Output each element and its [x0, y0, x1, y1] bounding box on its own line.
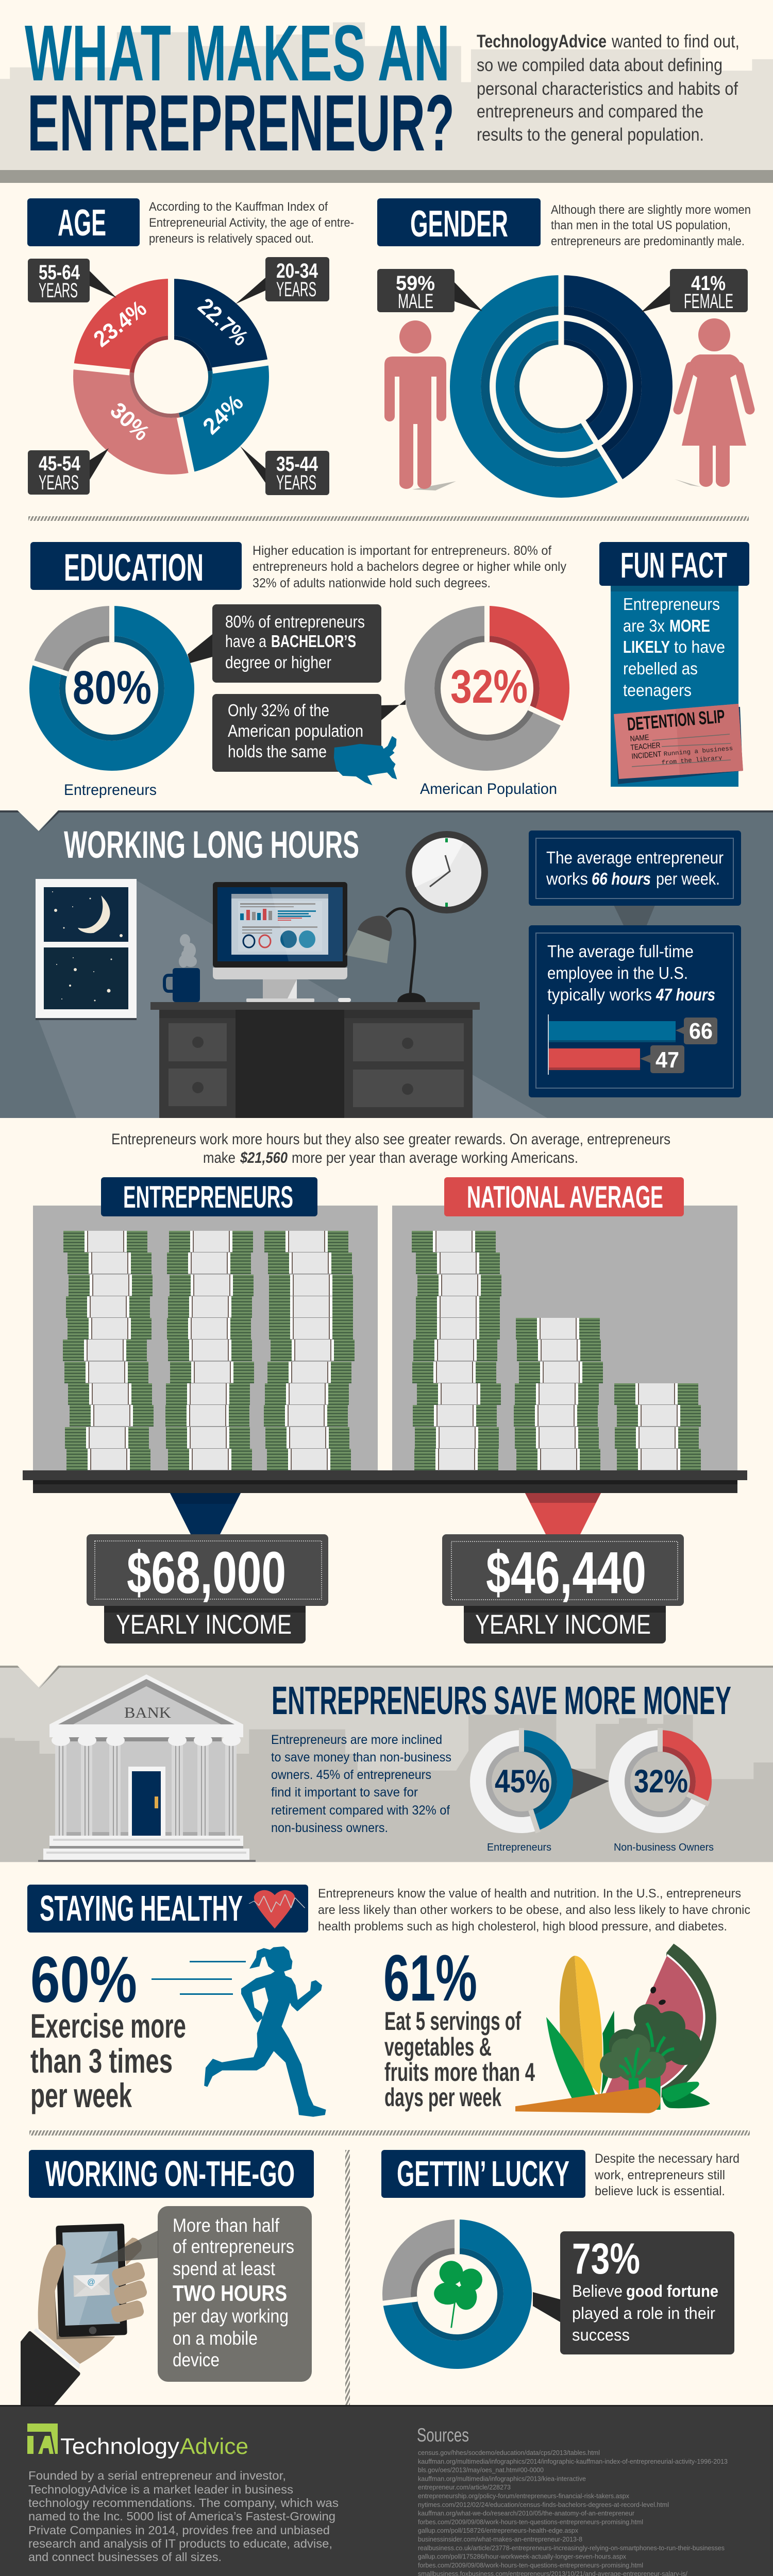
panel: age: [27, 198, 354, 495]
age percentages: [89, 294, 253, 446]
heading: [29, 2150, 314, 2198]
education donut: american population 32%: 32%: [450, 660, 528, 713]
money stack 5: [514, 1318, 603, 1470]
sources list: gallup.com/poll/158726/entrepreneurs-health-edge.aspx: [418, 2527, 578, 2534]
callout: 35-44 years: YEARS: [276, 471, 316, 494]
savings text: find it important to save for: [271, 1785, 418, 1800]
callout: bachelor's degree: BACHELOR’S: [271, 632, 356, 651]
bar chart: 66 vs 47 hours: 47: [656, 1047, 679, 1073]
icon: mouse: [338, 998, 351, 1002]
icon: heart: [249, 1890, 305, 1928]
callout: 59% male: 59%: [396, 272, 435, 295]
fun fact text: MORE: [669, 616, 710, 635]
callout: 59% male: [377, 269, 482, 313]
icon: us map: [334, 736, 397, 785]
intro text: [477, 31, 740, 145]
callout: 73%: played a role in their: [572, 2304, 715, 2323]
savings text: to save money than non-business: [271, 1750, 451, 1765]
company text: and connect businesses of all sizes.: [28, 2550, 222, 2564]
icon: bank: BANK: [124, 1704, 171, 1721]
fun fact text: rebelled as: [623, 659, 698, 678]
callout: 20-34 years: [236, 257, 329, 304]
income card: entrepreneurs: YEARLY INCOME: [116, 1609, 292, 1640]
heading: WORKING LONG HOURS: [64, 823, 359, 866]
callout: 59% male: MALE: [398, 290, 433, 313]
gray callout: per day working: [173, 2306, 289, 2327]
age percentages: 23.4%: [89, 296, 151, 352]
national average tab: NATIONAL AVERAGE: [467, 1180, 663, 1214]
fun fact text: LIKELY: [623, 637, 670, 656]
income text: Entrepreneurs work more hours but they also see greater rewards. On average, entrepreneurs: [111, 1131, 670, 1148]
sources list: realbusiness.co.uk/article/23778-entrepreneurs-increasingly-relying-on-smartphones-to-run-their-businesses: [418, 2544, 725, 2552]
sources list: census.gov/hhes/socdemo/education/data/cps/2013/tables.html: [418, 2449, 600, 2456]
income text: $21,560: [240, 1149, 288, 1166]
education text: entrepreneurs hold a bachelors degree or higher while only: [253, 560, 566, 574]
callout: 45-54 years: [28, 448, 109, 495]
label: Non-business Owners: [614, 1842, 714, 1853]
stat: 61% nutrition: days per week: [384, 2083, 501, 2112]
income card: entrepreneurs: [87, 1534, 328, 1643]
logo: Technology: [60, 2434, 179, 2459]
income text: [111, 1131, 670, 1166]
callout: employee hours with bar chart: 47 hours: [656, 985, 715, 1004]
income card: entrepreneurs: $68,000: [127, 1540, 286, 1606]
stat: 61% nutrition: [383, 1941, 535, 2112]
icon: man: [384, 320, 456, 490]
callout: employee hours with bar chart: employee in the U.S.: [547, 963, 688, 982]
heading: WORKING ON-THE-GO: [45, 2154, 295, 2194]
shelf: [23, 1470, 747, 1493]
lucky text: [594, 2151, 740, 2198]
funnel: national average: [525, 1493, 601, 1534]
sources heading: Sources: [417, 2425, 469, 2446]
age text: According to the Kauffman Index of: [149, 200, 328, 214]
icon: desk lamp: [345, 909, 426, 1002]
connector: [569, 1768, 609, 1800]
detention slip: from the library: [661, 754, 722, 767]
education text: [253, 544, 566, 590]
intro text: so we compiled data about defining: [477, 55, 722, 75]
callout: 41% female: [641, 269, 748, 313]
company text: named to the Inc. 5000 list of America’s Fastest-Growing: [28, 2510, 335, 2523]
sources list: forbes.com/2009/09/08/work-hours-ten-questions-entrepreneurs-promising.html: [418, 2518, 643, 2526]
lucky text: believe luck is essential.: [595, 2184, 725, 2198]
education donut: entrepreneurs 80%: [31, 604, 179, 756]
panel: fun fact: [599, 542, 749, 787]
label: Entrepreneurs: [487, 1842, 551, 1853]
stat: 61% nutrition: fruits more than 4: [384, 2058, 535, 2087]
connector: [533, 2292, 560, 2322]
company text: research and analysis of IT products to educate, advise,: [28, 2537, 332, 2550]
intro text: personal characteristics and habits of: [477, 79, 738, 99]
company text: [28, 2469, 339, 2564]
title: [25, 9, 455, 167]
callout: employee hours with bar chart: [529, 925, 741, 1097]
education donut: entrepreneurs 80%: 80%: [73, 662, 152, 714]
icon: window with moon: [36, 879, 137, 1020]
intro text: entrepreneurs and compared the: [477, 101, 703, 122]
gray callout: More than half: [173, 2215, 280, 2236]
callout: 45-54 years: 45-54: [39, 452, 81, 475]
income card: national average: YEARLY INCOME: [475, 1609, 651, 1640]
sources list: nytimes.com/2012/02/24/education/census-finds-bachelors-degrees-at-record-level.html: [418, 2501, 669, 2509]
callout: american population: American population: [228, 721, 363, 740]
bar chart: 66 vs 47 hours: 66: [689, 1019, 713, 1044]
gender heading: [377, 198, 541, 246]
icon: clock: [406, 831, 488, 913]
fun fact text: teenagers: [623, 681, 692, 700]
gray callout: on a mobile: [173, 2328, 258, 2349]
callout: 35-44 years: 35-44: [276, 453, 318, 476]
stat: 60% exercise: 60%: [30, 1943, 137, 2016]
stat: 61% nutrition: vegetables &: [384, 2032, 492, 2061]
funnel: entrepreneurs: [170, 1493, 241, 1534]
money stack 2: [165, 1231, 254, 1470]
gray backdrops: [33, 1206, 378, 1470]
company text: TechnologyAdvice is a market leader in business: [28, 2483, 293, 2496]
logo: Advice: [180, 2434, 248, 2459]
panel: staying healthy: [27, 1885, 750, 2116]
savings text: retirement compared with 32% of: [271, 1803, 450, 1818]
intro text: TechnologyAdvice: [477, 31, 607, 52]
stat: 60% exercise: [30, 1943, 186, 2114]
entrepreneurs tab: [101, 1177, 317, 1216]
label: american population: American Population: [420, 781, 557, 798]
heading: [381, 2150, 585, 2198]
header skyline: [0, 22, 773, 170]
sources list: businessinsider.com/what-makes-an-entrepreneur-2013-8: [418, 2535, 582, 2543]
gray callout: device: [173, 2349, 220, 2370]
gray callout: of entrepreneurs: [173, 2236, 294, 2257]
callout: entrepreneur hours: The average entrepreneur: [546, 848, 724, 867]
icon: clover: [434, 2261, 482, 2328]
bar chart: 66 vs 47 hours: [548, 1014, 717, 1075]
icon: runner: [152, 1946, 326, 2116]
sources list: [418, 2449, 728, 2576]
icon: bank: [38, 1674, 256, 1862]
sources list: entrepreneurship.org/policy-forum/entrepreneurs-financial-risk-takers.aspx: [418, 2492, 629, 2500]
title: ENTREPRENEUR?: [27, 78, 455, 167]
gender text: Although there are slightly more women: [551, 203, 751, 217]
sources list: gallup.com/poll/175286/hour-workweek-actually-longer-seven-hours.aspx: [418, 2553, 626, 2561]
icon: hand holding phone: @: [87, 2278, 95, 2287]
age donut chart: [71, 276, 271, 476]
stat: 60% exercise: per week: [30, 2076, 132, 2114]
stat: 61% nutrition: 61%: [383, 1941, 477, 2014]
savings donut: entrepreneurs 45%: 45%: [495, 1764, 550, 1800]
fun fact text: to have: [674, 637, 725, 656]
logo: [27, 2424, 248, 2459]
savings donut: non-business owners 32%: 32%: [634, 1764, 688, 1800]
age text: [149, 200, 354, 246]
callout: 20-34 years: 20-34: [276, 260, 318, 282]
sources list: kauffman.org/multimedia/infographics/2013/kiea-interactive: [418, 2475, 586, 2482]
gender text: than men in the total US population,: [551, 218, 731, 232]
national average tab: [444, 1177, 684, 1216]
detention slip: NAME: [630, 733, 649, 743]
money stack 3: [264, 1231, 355, 1470]
intro text: results to the general population.: [477, 125, 704, 145]
education heading: EDUCATION: [64, 546, 204, 589]
age percentages: 30%: [105, 398, 154, 446]
age text: Entrepreneurial Activity, the age of entre-: [149, 216, 354, 230]
savings donut: non-business owners 32%: [616, 1728, 709, 1825]
sources list: kauffman.org/multimedia/infographics/2014/infographic-kauffman-index-of-entrepreneurial-activity-1996-2013: [418, 2458, 728, 2465]
callout: american population: Only 32% of the: [228, 701, 329, 720]
callout: employee hours with bar chart: The average full-time: [547, 942, 694, 961]
fun fact text: are 3x: [623, 616, 665, 635]
company text: technology recommendations. The company, which was: [28, 2496, 339, 2510]
stat: 61% nutrition: Eat 5 servings of: [384, 2007, 521, 2036]
lucky text: Despite the necessary hard: [595, 2151, 740, 2166]
icon: coffee mug: [164, 934, 200, 1002]
savings text: non-business owners.: [271, 1821, 388, 1835]
heading: GETTIN’ LUCKY: [397, 2154, 569, 2194]
detention slip: Running a business: [663, 745, 733, 758]
gender text: [551, 203, 751, 248]
callout: bachelor's degree: 80% of entrepreneurs: [225, 612, 365, 631]
money stack 1: [63, 1231, 154, 1470]
heading: [27, 1885, 308, 1933]
desk: [150, 1002, 480, 1118]
lucky donut chart 73%: [380, 2217, 517, 2354]
callout: 73%: good fortune: [626, 2282, 718, 2300]
fun fact text: [623, 595, 725, 700]
fun fact heading: [599, 542, 749, 586]
heading: STAYING HEALTHY: [40, 1888, 243, 1928]
health text: health problems such as high cholesterol, high blood pressure, and diabetes.: [318, 1920, 727, 1934]
detention slip: TEACHER: [630, 741, 661, 752]
sources list: kauffman.org/what-we-do/research/2010/05/the-anatomy-of-an-entrepreneur: [418, 2510, 635, 2517]
fun fact text: Entrepreneurs: [623, 595, 720, 614]
income card: national average: $46,440: [486, 1540, 646, 1606]
footer: [0, 2405, 773, 2576]
callout: bachelor's degree: [188, 604, 381, 683]
health text: Entrepreneurs know the value of health and nutrition. In the U.S., entrepreneurs: [318, 1887, 741, 1901]
savings donut: entrepreneurs 45%: [478, 1728, 565, 1833]
panel: working on-the-go: [21, 2150, 314, 2405]
sources list: entrepreneur.com/article/228273: [418, 2483, 511, 2491]
callout: american population: [212, 694, 406, 772]
intro text: wanted to find out,: [611, 31, 740, 52]
callout: entrepreneur hours: 66 hours: [592, 869, 651, 888]
callout: 41% female: FEMALE: [684, 290, 733, 313]
panel: gender: [377, 198, 751, 490]
label: entrepreneurs: Entrepreneurs: [64, 782, 157, 799]
icon: woman: [675, 318, 750, 487]
panel: save more money: [0, 1666, 773, 1862]
sources list: bls.gov/oes/2013/may/oes_nat.htm#00-0000: [418, 2466, 544, 2474]
detention slip: INCIDENT: [631, 750, 662, 761]
gray callout: TWO HOURS: [173, 2281, 287, 2306]
callout: bachelor's degree: have a: [225, 632, 267, 651]
callout: bachelor's degree: degree or higher: [225, 653, 331, 672]
education donut: american population 32%: [419, 604, 564, 756]
fun fact body: [611, 586, 738, 787]
callout: 73%: [560, 2231, 734, 2354]
callout: 55-64 years: 55-64: [39, 261, 80, 284]
income text: more per year than average working Americans.: [292, 1149, 578, 1166]
header panel: [0, 9, 773, 183]
education text: 32% of adults nationwide hold such degrees.: [253, 576, 491, 590]
money stack 6: [614, 1383, 701, 1470]
age percentages: 24%: [198, 389, 248, 439]
company text: Founded by a serial entrepreneur and investor,: [28, 2469, 286, 2482]
callout: 20-34 years: YEARS: [276, 278, 316, 301]
callout connector: [614, 905, 655, 926]
panel: income: [23, 1131, 747, 1643]
gender heading: GENDER: [410, 204, 508, 245]
callout: entrepreneur hours: per week.: [656, 869, 720, 888]
gray callout: spend at least: [173, 2258, 276, 2279]
lucky text: work, entrepreneurs still: [594, 2168, 725, 2182]
education text: Higher education is important for entrepreneurs. 80% of: [253, 544, 551, 558]
callout: entrepreneur hours: works: [546, 869, 588, 888]
callout: entrepreneur hours: [529, 831, 741, 906]
money stack 4: [412, 1231, 501, 1470]
callout: american population: holds the same: [228, 742, 327, 761]
panel: education: [30, 542, 566, 799]
icon: hand holding phone: [21, 2224, 158, 2405]
panel: working long hours: [0, 810, 773, 1118]
savings text: owners. 45% of entrepreneurs: [271, 1768, 431, 1782]
health text: [318, 1887, 750, 1934]
callout: 55-64 years: [28, 259, 116, 302]
education heading: [30, 542, 242, 590]
callout: 41% female: 41%: [691, 272, 726, 295]
stat: 60% exercise: than 3 times: [30, 2042, 173, 2080]
age percentages: 22.7%: [193, 294, 253, 351]
icon: fruit and vegetables: [515, 1944, 716, 2113]
callout: 73%: Believe: [572, 2282, 623, 2300]
income text: make: [203, 1149, 236, 1166]
savings text: [271, 1733, 451, 1835]
income card: national average: [442, 1534, 684, 1643]
gender text: entrepreneurs are predominantly male.: [551, 234, 745, 248]
callout: 55-64 years: YEARS: [39, 279, 78, 302]
stat: 60% exercise: Exercise more: [30, 2007, 186, 2045]
age heading: [27, 198, 140, 246]
savings text: Entrepreneurs are more inclined: [271, 1733, 442, 1747]
gender double donut chart: [465, 273, 657, 483]
detention slip: [614, 704, 743, 784]
callout: 35-44 years: [240, 446, 329, 495]
health text: are less likely than other workers to be obese, and also less likely to have chronic: [318, 1903, 750, 1917]
icon: computer monitor: [213, 882, 347, 1002]
callout: 73%: success: [572, 2326, 630, 2344]
title: WHAT MAKES AN: [25, 9, 450, 97]
age text: preneurs is relatively spaced out.: [149, 232, 314, 246]
age heading: AGE: [58, 202, 106, 244]
callout: employee hours with bar chart: typically works: [547, 985, 652, 1004]
panel: gettin' lucky: [380, 2150, 740, 2354]
callout: 45-54 years: YEARS: [39, 471, 79, 494]
gray callout: [158, 2206, 312, 2382]
sources list: forbes.com/2009/09/08/work-hours-ten-questions-entrepreneurs-promising.html: [418, 2561, 643, 2569]
callout: 73%: 73%: [572, 2234, 640, 2283]
company text: Private Companies in 2014, provides free and unbiased: [28, 2523, 330, 2537]
entrepreneurs tab: ENTREPRENEURS: [123, 1180, 293, 1214]
